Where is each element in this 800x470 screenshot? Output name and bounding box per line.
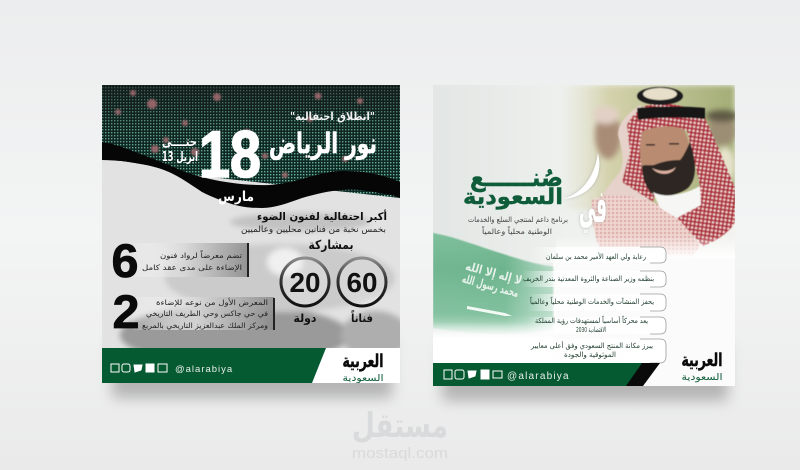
flag inscription [462,262,522,297]
heading: with participation: بمشاركة [308,237,354,252]
feature pills [522,247,666,363]
date range [162,140,198,164]
badge: 20 countries [281,258,329,326]
pill text: 2030 الاقتصادية [576,326,606,334]
stat: six artworks: 6 [112,234,138,287]
footer: السعودية [342,373,384,384]
portrait bottom fade [556,236,735,258]
blurred crowd background [560,85,738,210]
date range: حتــــى [162,135,197,150]
beard [642,142,695,196]
big date 18: 18 [199,117,261,191]
badge: 20 countries: دولة [294,311,317,326]
pill text: يحفز المنشآت والخدمات الوطنية محلياً وعالمياً [529,296,654,306]
dotted light installation photo [102,85,400,198]
Saudi flag [433,233,553,334]
handle: @alarabiya [507,371,570,382]
month label: مارس [218,189,254,205]
pill text: الموثوقية والجودة [564,351,616,359]
stat: two festivals: 2 [112,285,140,338]
stat: six artworks [112,243,249,278]
black wave band [102,142,400,208]
pill text: رعاية ولي العهد الأمير محمد بن سلمان [546,252,646,261]
heading: launch tag: "انطلاق احتفالية" [290,110,375,123]
white fade below flag [433,322,553,364]
pill text: يعد محركاً أساسياً لمستهدفات رؤية المملكة [535,315,648,325]
badge: 20 countries: 20 [290,267,320,298]
card shadows [112,340,728,401]
pill text: يبرز مكانة المنتج السعودي وفق أعلى معايير [530,341,653,350]
panel: made in Saudi poster [433,85,738,386]
subtitle: أكبر احتفالية لفنون الضوء [257,209,387,223]
head top ring and cord [637,87,683,105]
logo: العربية [682,350,722,371]
shoulder left [592,196,700,254]
footer [433,350,722,386]
description: برنامج داعم لمنتجي السلع والخدمات [468,215,568,224]
subtitle [241,209,387,235]
description: الوطنية محلياً وعالمياً [481,225,552,236]
flag inscription: لا إله إلا الله [464,259,524,288]
handle: @alarabiya [175,364,233,375]
heading: Saudi: السعودية [463,185,563,210]
pill text: بنظمه وزير الصناعة والثروة المعدنية بندر الخريف [523,275,654,283]
mouth and eyes [652,167,676,174]
subtitle: بخمس نخبة من فنانين محليين وعالميين [241,225,386,235]
social icons [111,364,167,372]
footer [102,348,400,384]
portrait [592,87,735,262]
heading: Noor Riyadh: نور الرياض [269,127,377,160]
flag inscription: محمد رسول الله [460,272,520,301]
stat: six artworks: الإضاءة على مدى عقد كامل [142,263,242,272]
panel: light festival poster [102,85,409,384]
light area under wave [102,160,170,173]
heading: made: صُنــــــع [470,163,563,193]
footer: السعودية [682,372,722,383]
panel: made in Saudi poster: في [579,179,607,233]
lower card wash [553,258,735,386]
badge: 60 artists: 60 [346,267,378,298]
social icons [444,370,502,379]
watermark: مستقل [352,406,448,446]
stat: two festivals: ومركز الملك عبدالعزيز التاريخي بالمربع [142,321,268,330]
face [639,126,690,171]
stat: two festivals: في حي جاكس وحي الطريف التاريخي [146,309,268,318]
stat: two festivals [114,294,275,330]
flag sword [467,306,512,316]
description [468,215,568,236]
stat: two festivals: المعرض الأول من نوعه للإضاءة [156,297,268,307]
calligraphy: in [563,153,607,233]
watermark: mostaql.com [352,445,448,462]
logo: العربية [342,351,384,372]
panel photo: market hall [117,211,400,348]
watermark [352,406,448,462]
badge: 60 artists [338,258,386,325]
badge: 60 artists: فناناً [351,309,373,325]
stat: six artworks: تضم معرضاً لرواد فنون [160,249,242,260]
pale headdress behind [602,105,651,202]
headdress [622,104,735,246]
pill text [523,252,654,359]
date range: ابريل 13 [162,150,198,165]
collar [653,186,701,218]
